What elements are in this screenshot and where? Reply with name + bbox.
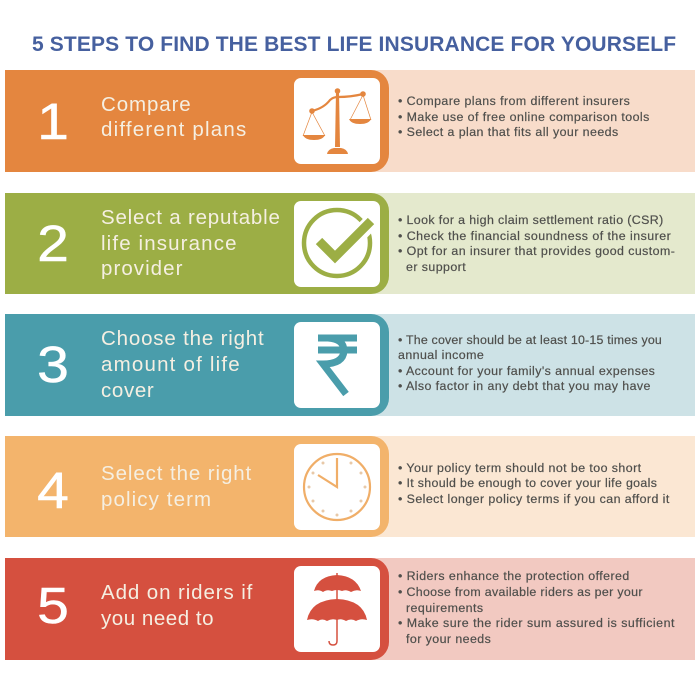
heading: step 4: Select the right <box>101 462 252 485</box>
panel: step 2 <box>5 193 695 294</box>
icon: rupee symbol <box>294 322 380 408</box>
bullet list: step 3: annual income <box>398 348 484 362</box>
heading: step 3: amount of life <box>101 353 241 376</box>
heading: step 2: life insurance <box>101 232 238 255</box>
step number 2: 2 <box>37 215 69 272</box>
heading: step 3: Choose the right <box>101 327 265 350</box>
bullet list: step 5: for your needs <box>406 632 491 646</box>
bullet list: step 1 <box>398 94 650 139</box>
bullet list: step 5 <box>398 569 675 646</box>
step number 3: 3 <box>37 336 69 393</box>
step number 5: 5 <box>37 577 69 634</box>
heading: step 2: Select a reputable <box>101 206 281 229</box>
icon: umbrellas <box>294 566 380 652</box>
bullet list: step 2: • Check the financial soundness of the insurer <box>398 229 671 243</box>
heading: step 2 <box>101 206 281 280</box>
heading: step 1: Compare <box>101 93 192 116</box>
heading: step 4: policy term <box>101 488 212 511</box>
bullet list: step 2: • Opt for an insurer that provides good custom- <box>398 244 675 258</box>
bullet list: step 4: • Select longer policy terms if you can afford it <box>398 492 670 506</box>
panel: step 5 <box>5 558 695 660</box>
bullet list: step 3: • Account for your family's annual expenses <box>398 364 655 378</box>
icon: balance scale <box>294 78 380 164</box>
bullet list: step 2: er support <box>406 260 466 274</box>
bullet list: step 4 <box>398 461 670 506</box>
heading: step 3: cover <box>101 379 154 402</box>
bullet list: step 4: • Your policy term should not be too short <box>398 461 642 475</box>
bullet list: step 3: • The cover should be at least 10-15 times you <box>398 333 662 347</box>
heading: step 1: different plans <box>101 118 247 141</box>
bullet list: step 5: requirements <box>406 601 483 615</box>
heading: step 2: provider <box>101 257 183 280</box>
heading: step 5: Add on riders if <box>101 581 253 604</box>
bullet list: step 5: • Make sure the rider sum assured is sufficient <box>398 616 675 630</box>
step number 1: 1 <box>37 93 69 150</box>
bullet list: step 5: • Choose from available riders as per your <box>398 585 643 599</box>
step number 4: 4 <box>37 462 69 519</box>
bullet list: step 1: • Compare plans from different insurers <box>398 94 630 108</box>
heading: step 5 <box>101 581 253 630</box>
icon: clock <box>294 444 380 530</box>
panel: step 1 <box>5 70 695 172</box>
panel: step 3 <box>5 314 695 416</box>
title: 5 STEPS TO FIND THE BEST LIFE INSURANCE FOR YOURSELF <box>32 33 676 56</box>
heading: step 4 <box>101 462 252 511</box>
icon: check mark in circle <box>294 201 380 287</box>
bullet list: step 1: • Make use of free online comparison tools <box>398 110 650 124</box>
bullet list: step 4: • It should be enough to cover your life goals <box>398 476 657 490</box>
bullet list: step 3: • Also factor in any debt that you may have <box>398 379 651 393</box>
bullet list: step 5: • Riders enhance the protection offered <box>398 569 630 583</box>
heading: step 1 <box>101 93 247 141</box>
bullet list: step 2 <box>398 213 675 274</box>
panel: step 4 <box>5 436 695 537</box>
bullet list: step 1: • Select a plan that fits all your needs <box>398 125 619 139</box>
bullet list: step 3 <box>398 333 662 393</box>
heading: step 3 <box>101 327 265 402</box>
heading: step 5: you need to <box>101 607 214 630</box>
bullet list: step 2: • Look for a high claim settlement ratio (CSR) <box>398 213 664 227</box>
